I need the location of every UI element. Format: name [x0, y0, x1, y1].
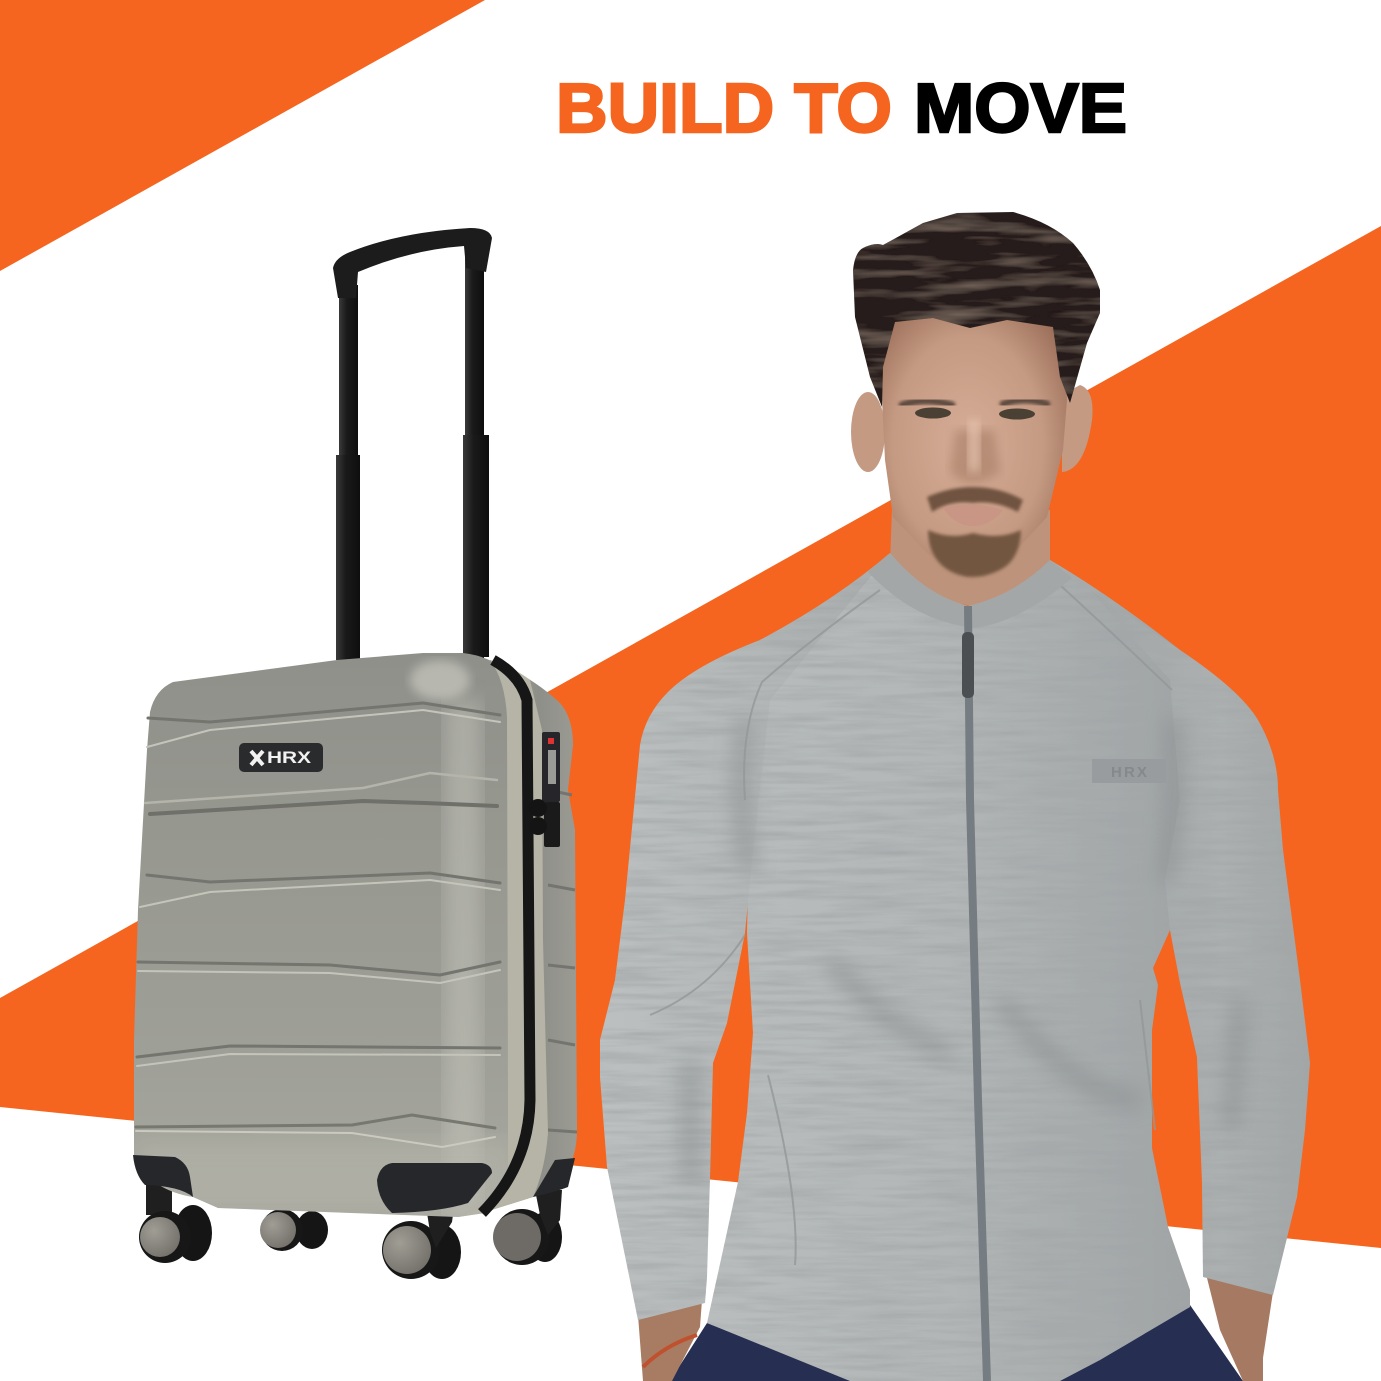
title [556, 69, 1127, 147]
zipper pull [962, 632, 974, 698]
wheel: rear left [139, 1185, 212, 1263]
suitcase corner bumpers [133, 1155, 575, 1213]
right hand and wrist [1205, 1270, 1273, 1381]
title: black word: MOVE [914, 69, 1127, 147]
suitcase side ribs [548, 790, 577, 1132]
jacket [600, 553, 1310, 1381]
suitcase ribs [136, 703, 500, 1147]
suitcase logo badge: HRX [267, 748, 312, 767]
suitcase logo badge [239, 743, 323, 772]
thread bracelet [643, 1335, 697, 1367]
hair [853, 212, 1100, 407]
suitcase wheels [139, 1185, 562, 1279]
left hand and wrist [638, 1300, 702, 1381]
goatee [928, 530, 1021, 577]
face [880, 310, 1067, 577]
wheel: front right [493, 1190, 562, 1265]
jacket torso [707, 553, 1190, 1381]
orange triangle: top left [0, 0, 485, 271]
eyes [915, 408, 1035, 420]
suitcase zipper [482, 660, 530, 1213]
title: orange words: BUILD TO [556, 69, 892, 147]
jacket seams [650, 585, 1172, 1265]
chest logo: HRX [1111, 764, 1147, 781]
eyebrows [902, 400, 1047, 405]
orange diagonal band [0, 226, 1381, 1248]
jacket right sleeve [1090, 590, 1310, 1295]
wheel: rear centre [260, 1209, 328, 1251]
suitcase combination lock [529, 732, 560, 847]
logo mark [251, 751, 263, 765]
nose shadow [950, 430, 1000, 483]
suitcase front shell [134, 653, 510, 1217]
ears [851, 385, 1092, 472]
wheel: front centre [382, 1200, 461, 1279]
lips [943, 504, 1003, 526]
suitcase zipper tape [458, 660, 548, 1217]
neck [890, 510, 1050, 606]
suitcase telescopic handle [333, 228, 492, 660]
suitcase shell highlights [134, 660, 514, 1220]
nose highlight [968, 420, 980, 472]
trousers [670, 1305, 1243, 1381]
suitcase side panel [482, 660, 577, 1213]
jacket collar [868, 553, 1072, 628]
jacket zipper [968, 606, 987, 1381]
jacket shading [690, 720, 1240, 1180]
moustache [927, 487, 1023, 512]
suitcase [133, 228, 577, 1279]
person [600, 212, 1310, 1381]
jacket left sleeve [600, 553, 890, 1320]
chest logo [1092, 759, 1166, 783]
